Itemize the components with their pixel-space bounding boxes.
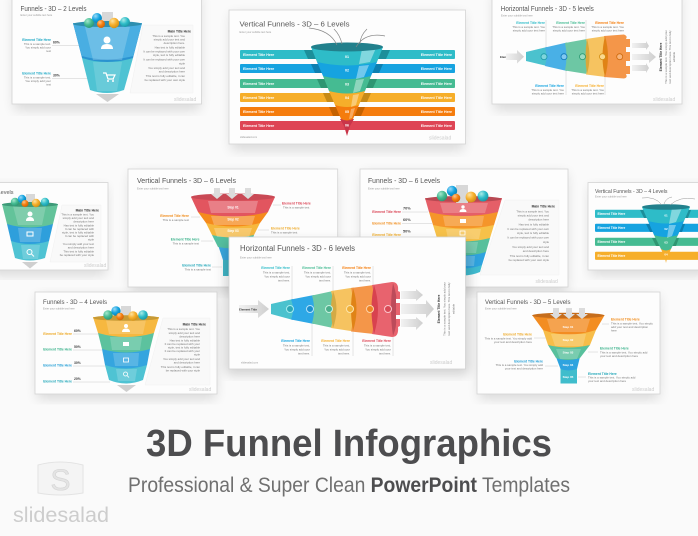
side panel: description here <box>528 218 549 222</box>
panel: funnels 3D 6 levels <box>360 169 568 292</box>
callouts: your text and description here <box>494 340 532 344</box>
left labels: Element Title Here <box>22 72 51 76</box>
percent labels: Element Title Here <box>43 332 72 336</box>
funnel: red to teal <box>191 188 275 276</box>
side panel: This text is fully editable, it can <box>510 254 549 258</box>
main title: 3D Funnel Infographics <box>146 423 552 465</box>
side panel: It can be replaced with your <box>165 342 200 346</box>
top labels: Element Title Here <box>342 266 371 270</box>
side panel: main title text: and description here <box>159 70 185 74</box>
panel: horizontal funnels 3D 6 levels center: slidesalad <box>430 360 452 366</box>
funnel: 4 levels: 03 <box>664 240 668 244</box>
side panel: This is a sample text. You <box>167 327 200 331</box>
left percent labels: 70% <box>403 206 411 210</box>
callouts: This is a sample text <box>163 218 189 222</box>
top labels: text here. <box>278 278 290 282</box>
bottom labels: This is a sample text. <box>323 344 350 348</box>
callouts: your text and description here <box>505 366 543 370</box>
labels top and bottom <box>500 20 624 96</box>
heading: Funnels - 3D – 6 Levels <box>368 176 440 185</box>
funnel: red to teal: Step 03 <box>227 229 239 233</box>
side panel: and description here <box>68 246 94 250</box>
side panel <box>145 318 210 385</box>
callouts: This is a sample text. You simply add <box>588 376 636 380</box>
callouts: Element Title Here <box>514 360 543 364</box>
bottom labels: This is a sample text. <box>283 344 310 348</box>
side panel: You simply add your text <box>63 242 94 246</box>
bottom labels: You simply add your <box>324 348 350 352</box>
coloured bars: Element Title Here <box>243 82 274 86</box>
panel: vertical funnels 3D 6 levels top: Enter your subtitle text here <box>240 30 272 34</box>
rotated description: Element Title Here <box>659 42 663 71</box>
panel: vertical funnels 3D 6 levels middle: Enter your subtitle text here <box>137 186 169 190</box>
side panel: be replaced with your style <box>60 253 94 257</box>
logo: slidesalad: S <box>50 464 71 497</box>
heading: Vertical Funnels - 3D – 6 Levels <box>137 176 236 185</box>
left labels <box>22 38 88 86</box>
bars: Element Title Here <box>598 212 625 216</box>
percent labels: Element Title Here <box>43 380 72 384</box>
panel: funnels 3D 2 levels: slidesalad <box>174 97 196 103</box>
labels top and bottom: simply add your text here <box>513 28 545 32</box>
coloured bars: Element Title Here <box>421 110 452 114</box>
callouts: This is a sample text <box>271 230 298 234</box>
left labels: text <box>46 49 51 53</box>
side panel: main title text: Main Title Here <box>168 30 191 34</box>
coloured bars: Element Title Here <box>421 67 452 71</box>
top labels: You simply add your <box>264 274 290 278</box>
callouts: This is a sample text <box>173 242 199 246</box>
funnel: red to teal: Step 01 <box>227 206 239 210</box>
left percent labels: Element Title Here <box>372 210 401 214</box>
left percent labels: Element Title Here <box>372 222 401 226</box>
side panel: main title text: This text is fully editable, it can <box>146 74 185 78</box>
labels top and bottom: This is a sample text. You <box>512 25 545 29</box>
callouts: This is a sample text. You simply add <box>485 336 532 340</box>
coloured bars: Element Title Here <box>421 82 452 86</box>
funnel: 6 levels: 05 <box>345 110 349 114</box>
side panel: main title text: It can be replaced with your own <box>144 58 185 62</box>
top labels: text here. <box>359 278 371 282</box>
callouts: This is a sample text <box>283 206 310 210</box>
side panel: main title text: simply add your text and <box>154 38 185 42</box>
labels top and bottom: This is a sample text. You <box>531 88 564 92</box>
labels top and bottom: simply add your text here <box>592 28 624 32</box>
side panel: and description here <box>523 249 549 253</box>
funnel: 6 levels: 01 <box>345 55 349 59</box>
funnel: horizontal 5 levels <box>506 34 656 78</box>
side panel: main title text: style <box>179 62 185 66</box>
callouts <box>485 318 653 383</box>
rotated description: This is a sample text. You simply add your <box>664 30 668 84</box>
labels top and bottom: This is a sample text. You <box>552 25 585 29</box>
callouts: This is a sample text. You simply add <box>496 363 543 367</box>
coloured bars: Element Title Here <box>243 110 274 114</box>
side panel: main title text: description here. <box>164 41 185 45</box>
callouts: This is a sample text <box>185 268 211 272</box>
heading: Horizontal Funnels - 3D - 6 levels <box>240 244 355 253</box>
side panel: main title text <box>130 25 193 93</box>
funnel: 5 levels: Step 01 <box>563 325 574 329</box>
funnel: 6 levels: 06 <box>345 124 349 128</box>
coloured bars: Element Title Here <box>243 67 274 71</box>
callouts: your text and description here <box>588 379 626 383</box>
side panel: style, text is fully editable <box>517 231 549 235</box>
panel: horizontal funnels 3D 5 levels: Enter your subtitle text here <box>501 14 533 18</box>
panel: vertical funnels 3D 4 levels <box>588 183 698 275</box>
panel: vertical funnels 3D 6 levels top <box>229 10 466 150</box>
heading: Funnels - 3D – 4 Levels <box>43 299 108 306</box>
percent labels: 20% <box>74 377 81 381</box>
funnel: 6 levels with balls <box>425 185 502 276</box>
panel: funnels 3D 4 levels <box>35 292 217 399</box>
callouts <box>160 202 311 272</box>
rotated description: This is a sample text. You simply add your <box>442 282 446 336</box>
top labels: This is a sample text. <box>344 270 371 274</box>
bars: Element Title Here <box>598 254 625 258</box>
callouts: Element Title Here <box>588 372 617 376</box>
side panel: be replaced with your style <box>166 368 200 372</box>
funnel: 6 levels: 04 <box>345 96 349 100</box>
panel: funnels 3D 6 levels: Enter your subtitle text here <box>368 186 400 190</box>
side panel: style <box>543 240 549 244</box>
side panel: style, text is fully editable <box>168 346 200 350</box>
callouts: add your text and description <box>611 325 649 329</box>
funnel: 5 levels <box>532 308 605 384</box>
bottom labels: Element Title Here <box>362 339 391 343</box>
funnel: 4 levels with balls <box>93 306 159 392</box>
left labels: 30% <box>53 74 60 78</box>
bottom labels: text here. <box>338 352 350 356</box>
heading: Vertical Funnels - 3D – 6 Levels <box>240 20 350 28</box>
panel: funnels 3D 6 levels: slidesalad <box>536 279 558 285</box>
panel: vertical funnels 3D 5 levels: Enter your subtitle text here <box>485 306 517 310</box>
labels top and bottom: Element Title Here <box>516 21 545 25</box>
side panel: This text is fully editable, it can <box>161 365 200 369</box>
left labels: text <box>46 82 51 86</box>
side panel: It can be replaced with your own <box>508 227 549 231</box>
percent labels: Element Title Here <box>43 348 72 352</box>
labels top and bottom: Element Title Here <box>575 84 604 88</box>
funnel: 4 levels: 02 <box>664 227 668 231</box>
funnel: horizontal 6 levels <box>239 282 434 337</box>
labels top and bottom: This is a sample text. You <box>591 25 624 29</box>
funnel: 2 levels <box>73 12 142 102</box>
heading: Horizontal Funnels - 3D - 5 levels <box>501 4 594 13</box>
side panel: main title text: Has text is fully editable <box>155 46 185 50</box>
side panel: You simply add your text and <box>512 245 549 249</box>
side panel: style <box>88 238 94 242</box>
bars: Element Title Here <box>598 226 625 230</box>
left labels: You simply add your <box>25 46 51 50</box>
panel: vertical funnels 3D 4 levels: Enter your subtitle text here <box>595 194 627 198</box>
bottom labels: Element Title Here <box>281 339 310 343</box>
callouts: Element Title Here <box>271 226 300 230</box>
left percent labels: Element Title Here <box>372 233 401 237</box>
panel: horizontal funnels 3D 6 levels center: Enter your subtitle text here <box>240 256 272 260</box>
side panel: This is a sample text. You <box>516 210 549 214</box>
left labels: This is a sample text. <box>24 42 51 46</box>
callouts: here <box>611 328 617 332</box>
bottom labels <box>281 318 393 356</box>
panel: funnels 3D 3 levels cropped left <box>0 183 108 275</box>
labels top and bottom: Element Title Here <box>556 21 585 25</box>
funnel: red to teal: Step 02 <box>227 218 239 222</box>
panel: funnels 3D 4 levels: slidesalad <box>189 387 211 393</box>
side panel: be replaced with your own style <box>509 258 549 262</box>
heading: Funnels - 3D – 2 Levels <box>20 4 87 13</box>
rotated description: text and description here. This text is fully <box>447 282 451 335</box>
labels top and bottom: simply add your text here <box>532 92 564 96</box>
side panel: This text is fully editable <box>63 250 94 254</box>
left labels: You simply add your <box>25 79 51 83</box>
left percent labels: 50% <box>403 230 411 234</box>
panel: vertical funnels 3D 6 levels top: slidesalad <box>429 136 451 142</box>
panel: vertical funnels 3D 6 levels top: slidesalad.com <box>240 135 257 139</box>
funnel: 5 levels: Step 03 <box>563 350 574 354</box>
subtitle: Professional & Super Clean PowerPoint Templates <box>128 474 570 497</box>
rotated description: text and description here. This text is fully <box>668 30 672 83</box>
rotated description: editable <box>672 52 676 62</box>
funnel: 5 levels: Step 02 <box>563 338 574 342</box>
coloured bars: Element Title Here <box>421 53 452 57</box>
callouts: Element Title Here <box>503 332 532 336</box>
panel: horizontal funnels 3D 5 levels: slidesalad <box>653 97 675 103</box>
coloured bars: Element Title Here <box>421 124 452 128</box>
funnel: 3 levels <box>2 194 58 268</box>
side panel: It can be replaced with your own <box>508 236 549 240</box>
callouts: This is a sample text. You simply <box>611 322 653 326</box>
panel: funnels 3D 2 levels: Enter your subtitle text here <box>20 13 53 17</box>
funnel: 5 levels: Step 04 <box>563 363 574 367</box>
left percent labels: 60% <box>403 218 411 222</box>
funnel: 4 levels: 04 <box>664 252 668 256</box>
side panel: Main Title Here <box>532 204 555 208</box>
side panel: main title text: This is a sample text. You <box>152 34 185 38</box>
side panel: main title text: style, text is fully editable <box>153 53 185 57</box>
top labels: This is a sample text. <box>263 270 290 274</box>
callouts: Element Title Here <box>282 202 311 206</box>
bars <box>595 210 698 260</box>
panel: vertical funnels 3D 5 levels <box>477 292 660 399</box>
percent labels: 30% <box>74 361 81 365</box>
side panel: description here <box>73 220 94 224</box>
top labels: You simply add your <box>345 274 371 278</box>
side panel: and description here <box>174 360 200 364</box>
coloured bars <box>240 50 455 130</box>
funnel: 4 levels <box>640 197 695 263</box>
percent labels: 60% <box>74 329 81 333</box>
rotated description: Element Title Here <box>437 294 441 323</box>
funnel: horizontal 6 levels: Element Title <box>239 308 257 312</box>
bottom labels: text here. <box>298 352 310 356</box>
labels top and bottom: Element Title Here <box>595 21 624 25</box>
side panel: It can be replaced with <box>65 234 94 238</box>
top labels: You simply add your <box>305 274 331 278</box>
top labels <box>261 266 373 302</box>
funnel: 4 levels: 01 <box>664 214 668 218</box>
heading: Vertical Funnels - 3D – 4 Levels <box>595 189 668 195</box>
percent labels: Element Title Here <box>43 364 72 368</box>
percent labels: 50% <box>74 345 81 349</box>
coloured bars: Element Title Here <box>421 96 452 100</box>
bars: Element Title Here <box>598 240 625 244</box>
coloured bars: Element Title Here <box>243 96 274 100</box>
side panel: description here <box>179 334 200 338</box>
bottom labels: You simply add your <box>284 348 310 352</box>
side panel: Has text is fully editable <box>64 224 94 228</box>
coloured bars: Element Title Here <box>243 124 274 128</box>
callouts: Element Title Here <box>182 264 211 268</box>
funnel: 6 levels: 02 <box>345 68 349 72</box>
top labels: Element Title Here <box>261 266 290 270</box>
side panel: Main Title Here <box>183 322 206 326</box>
percent labels <box>43 329 110 384</box>
callouts: Element Title Here <box>611 318 640 322</box>
panel: funnels 3D 2 levels <box>12 0 202 110</box>
left percent labels <box>372 206 432 237</box>
panel: horizontal funnels 3D 6 levels center <box>226 237 469 374</box>
bottom labels: You simply add your <box>365 348 391 352</box>
side panel: main title text: You simply add your text and <box>148 66 185 70</box>
logo: slidesalad: slidesalad <box>13 504 109 527</box>
callouts: your text and description here <box>600 354 638 358</box>
bottom labels: This is a sample text. <box>364 344 391 348</box>
logo: slidesalad <box>13 462 109 527</box>
labels top and bottom: Element Title <box>500 55 518 59</box>
side panel: main title text: be replaced with your own style <box>145 78 185 82</box>
panel: horizontal funnels 3D 6 levels center: slidesalad.com <box>241 360 258 364</box>
funnel: 6 levels <box>304 28 390 136</box>
top labels: This is a sample text. <box>304 270 331 274</box>
callouts: Element Title Here <box>171 238 200 242</box>
bottom labels: Element Title Here <box>321 339 350 343</box>
side panel <box>480 200 559 275</box>
side panel: simply add your text and <box>63 216 94 220</box>
side panel: It can be replaced with your <box>165 349 200 353</box>
labels top and bottom: simply add your text here <box>572 92 604 96</box>
side panel: You simply add your text and <box>163 357 200 361</box>
panel: funnels 3D 4 levels: Enter your subtitle text here <box>43 306 75 310</box>
callouts: This is a sample text. You simply add <box>600 350 648 354</box>
rotated description <box>437 282 456 336</box>
coloured bars: Element Title Here <box>243 53 274 57</box>
side panel: simply add your text and <box>169 331 200 335</box>
funnel: 5 levels: Step 05 <box>563 375 574 379</box>
labels top and bottom: This is a sample text. You <box>571 88 604 92</box>
top labels: Element Title Here <box>302 266 331 270</box>
side panel: Has text is fully editable <box>170 338 200 342</box>
bottom labels: text here. <box>379 352 391 356</box>
side panel: style <box>194 352 200 356</box>
left labels: This is a sample text. <box>24 76 51 80</box>
panel: horizontal funnels 3D 5 levels <box>492 0 682 110</box>
panel: vertical funnels 3D 6 levels middle <box>128 169 338 292</box>
side panel <box>50 205 101 262</box>
side panel: Has text is fully editable <box>519 222 549 226</box>
left labels: 60% <box>53 40 60 44</box>
side panel: main title text: It can be replaced with your own <box>144 50 185 54</box>
callouts: Element Title Here <box>160 214 189 218</box>
left labels: Element Title Here <box>22 38 51 42</box>
panel: vertical funnels 3D 5 levels: slidesalad <box>632 387 654 393</box>
rotated description <box>659 30 676 84</box>
side panel: It can be replaced with <box>65 227 94 231</box>
side panel: This is a sample text. You <box>61 212 94 216</box>
side panel: simply add your text and <box>518 214 549 218</box>
callouts: Element Title Here <box>600 346 629 350</box>
heading: Vertical Funnels - 3D – 5 Levels <box>485 299 571 306</box>
labels top and bottom: Element Title Here <box>535 84 564 88</box>
side panel: style, text is fully editable <box>62 230 94 234</box>
panel: funnels 3D 3 levels cropped left: slidesalad <box>84 263 106 269</box>
labels top and bottom: simply add your text here <box>553 28 585 32</box>
top labels: text here. <box>319 278 331 282</box>
rotated description: editable <box>452 304 456 314</box>
side panel: Main Title Here <box>76 208 99 212</box>
funnel: 6 levels: 03 <box>345 82 349 86</box>
